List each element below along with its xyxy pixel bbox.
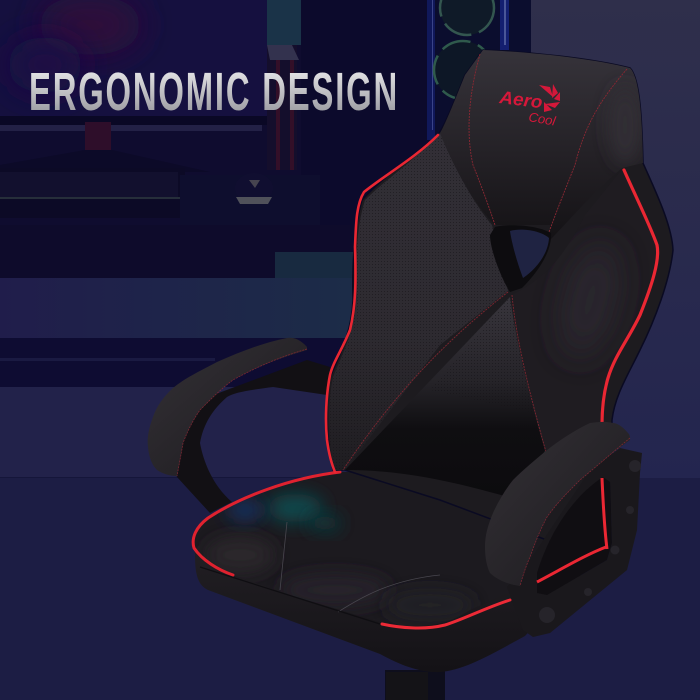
seat shading and teal reflection <box>212 486 441 608</box>
left armrest <box>148 338 330 513</box>
PC case with fans <box>427 0 531 140</box>
back cut-out <box>490 225 551 292</box>
backrest red piping <box>326 135 658 472</box>
seat seams <box>280 522 440 612</box>
red piping seen through bracket <box>602 478 607 549</box>
office chair <box>148 50 673 700</box>
left perforated panel <box>329 133 508 470</box>
chair pedestal <box>385 670 445 700</box>
right back panel <box>558 247 622 353</box>
right armrest pad <box>485 422 630 586</box>
headrest stitching <box>469 54 627 235</box>
bracket bolts <box>539 460 641 623</box>
lumbar stitching <box>343 292 546 470</box>
AeroCool logo: Aero <box>497 87 544 112</box>
headrest <box>440 50 643 240</box>
title: ERGONOMIC DESIGN <box>29 62 399 122</box>
arm support <box>165 360 330 513</box>
right armrest bracket <box>507 448 642 637</box>
backrest <box>326 50 673 545</box>
AeroCool logo <box>497 84 560 129</box>
seat red piping <box>193 472 340 575</box>
central mesh panel <box>345 297 545 500</box>
AeroCool logo: Cool <box>527 109 558 129</box>
seat cushion <box>193 472 600 672</box>
left armrest stitching <box>177 349 307 476</box>
arm pad <box>148 338 307 476</box>
red books beside monitor <box>267 45 299 170</box>
keyboard and mouse on desk <box>0 168 320 225</box>
monitor <box>0 0 267 172</box>
